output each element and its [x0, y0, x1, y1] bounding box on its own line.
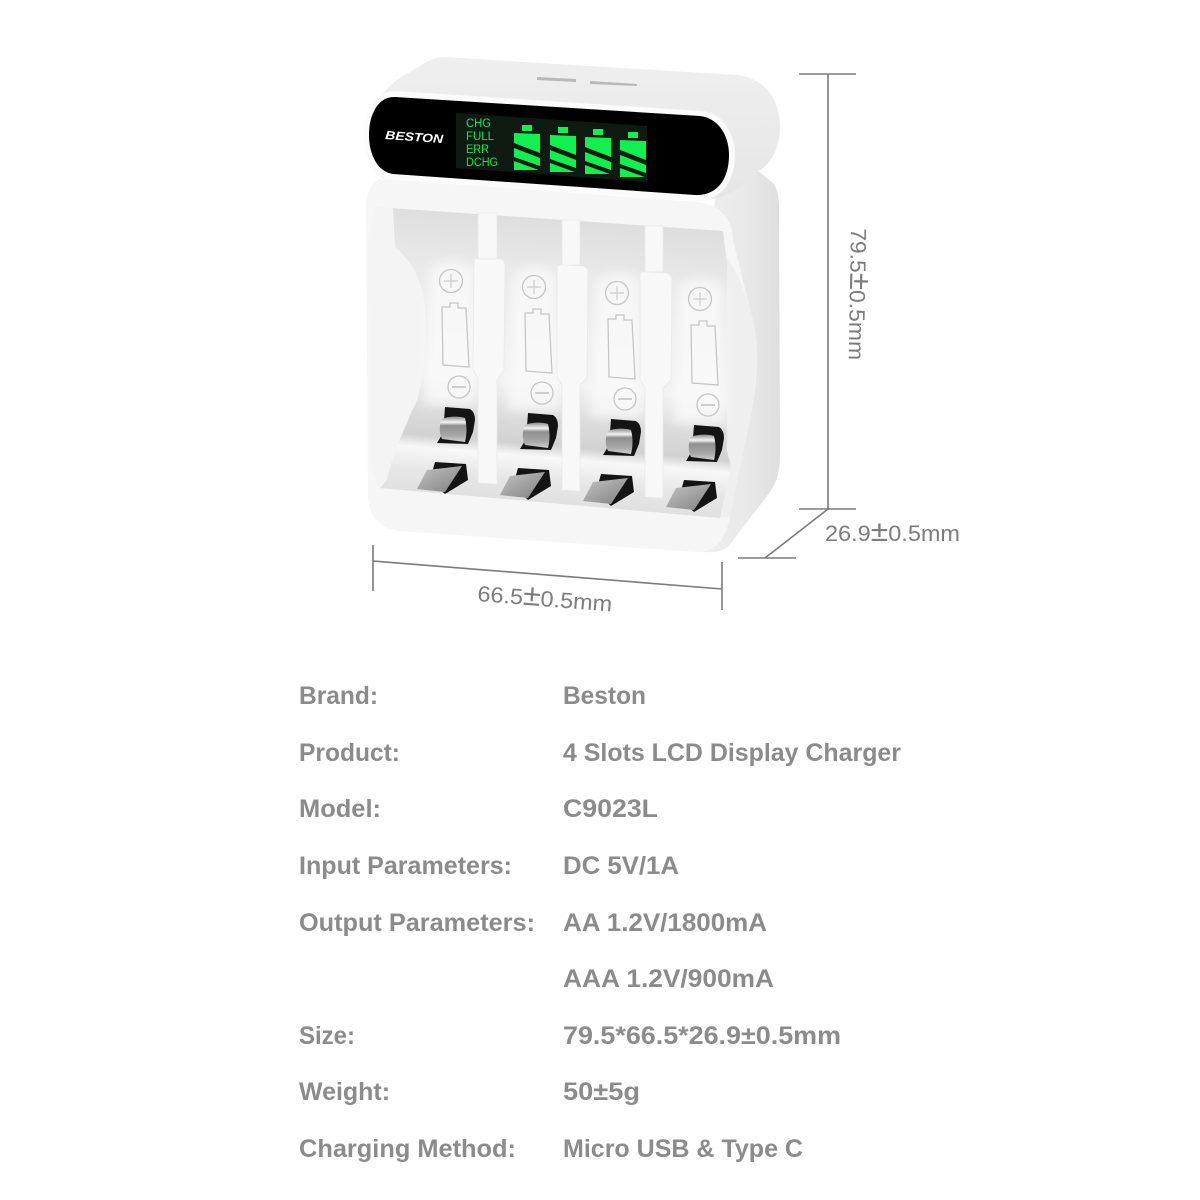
front face of charger: [366, 179, 757, 552]
battery well: [370, 207, 731, 518]
spec: weight: [299, 1078, 640, 1106]
LCD status labels: [466, 118, 498, 169]
product: battery charger: [364, 57, 780, 552]
dimension: width: 66.5±0.5mm: [476, 575, 614, 619]
spec: size: [299, 1022, 841, 1050]
spec: weight: 50±5g: [563, 1078, 640, 1106]
LCD battery 3: [585, 129, 611, 174]
spec: brand: Beston: [563, 682, 646, 710]
top cap of charger: [365, 57, 780, 200]
LCD status labels: CHG: [466, 118, 491, 130]
LCD status labels: ERR: [466, 144, 489, 156]
dimension: width: [373, 545, 722, 619]
LCD status labels: DCHG: [466, 157, 498, 169]
right curved wall: [720, 257, 757, 518]
dimension: height: 79.5 ± 0.5mm: [842, 228, 877, 360]
spec: input parameters: DC 5V/1A: [563, 852, 679, 880]
specifications table: [299, 682, 901, 1163]
spec: output parameters: AA 1.2V/1800mA: [563, 909, 767, 937]
spec: charging method: Charging Method:: [299, 1135, 516, 1163]
side face of charger: [695, 168, 780, 552]
spec: model: [299, 795, 658, 823]
slot 2: [500, 267, 559, 500]
spec: product: [299, 739, 901, 767]
black display panel: [369, 97, 729, 195]
spec: model: C9023L: [563, 795, 658, 823]
slot 3: [583, 273, 642, 506]
LCD battery 4: [620, 132, 646, 178]
spec: brand: Brand:: [299, 682, 378, 710]
spec: input parameters: [299, 852, 679, 880]
spec: output parameters: [299, 909, 774, 993]
divider ribs: [473, 213, 672, 498]
spec: product: 4 Slots LCD Display Charger: [563, 739, 901, 767]
dimension: height: [799, 74, 877, 509]
spec: product: Product:: [299, 739, 400, 767]
dimension: depth: [738, 509, 960, 558]
spec: model: Model:: [299, 795, 381, 823]
spec: charging method: [299, 1135, 803, 1163]
dimension: depth: 26.9±0.5mm: [825, 515, 960, 548]
spec: size: 79.5*66.5*26.9±0.5mm: [563, 1022, 841, 1050]
spec: brand: [299, 682, 646, 710]
LCD status labels: FULL: [466, 131, 495, 143]
LCD battery 1: [514, 125, 540, 170]
spec: size: Size:: [299, 1022, 355, 1050]
slot 4: [666, 279, 725, 512]
spec: weight: Weight:: [299, 1078, 390, 1106]
brand logo: BESTON: [385, 128, 444, 146]
LCD screen: [456, 113, 647, 182]
display rim: [364, 91, 735, 201]
top slits: [537, 77, 637, 86]
spec: input parameters: Input Parameters:: [299, 852, 512, 880]
slot 1: [417, 261, 476, 494]
spec: output parameters: AAA 1.2V/900mA: [563, 965, 774, 993]
left curved wall: [368, 207, 425, 488]
LCD battery 2: [550, 127, 576, 172]
spec: charging method: Micro USB & Type C: [563, 1135, 803, 1163]
spec: output parameters: Output Parameters:: [299, 909, 535, 937]
